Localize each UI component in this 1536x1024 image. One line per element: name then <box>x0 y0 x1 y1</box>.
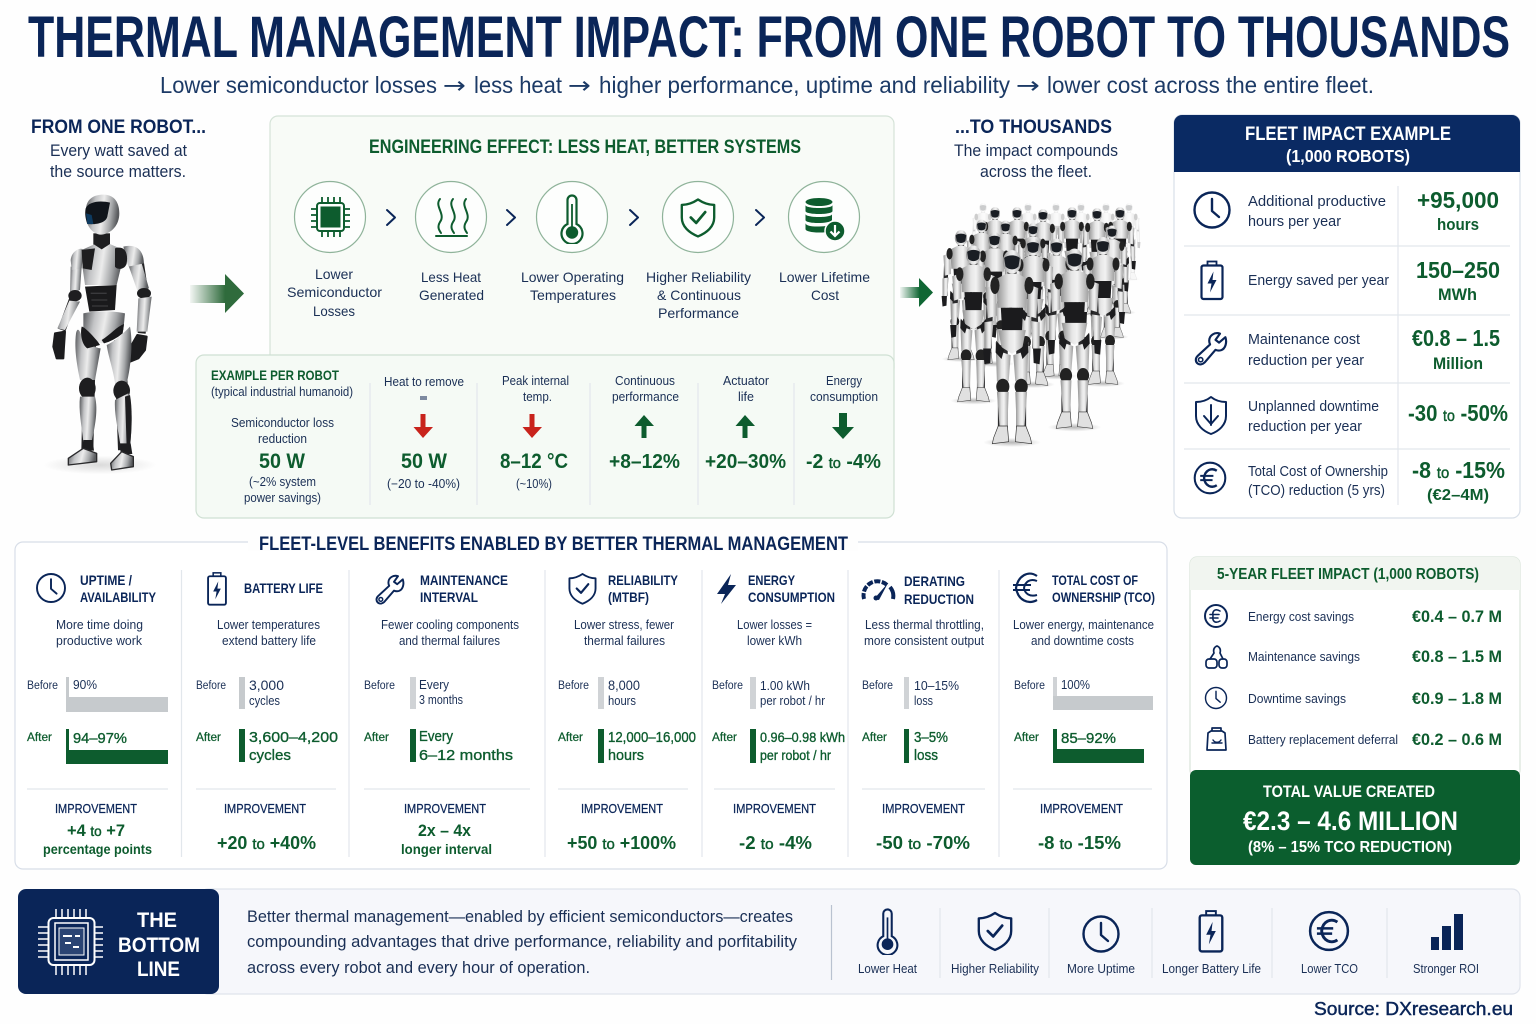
column: total cost of ownership: and downtime costs <box>1031 634 1134 648</box>
row: energy saved: Energy saved per year <box>1248 273 1389 289</box>
column: derating reduction: IMPROVEMENT <box>882 801 965 816</box>
callout: total value created: (8% – 15% TCO REDUCTION) <box>1248 839 1452 856</box>
subtitle: Lower semiconductor losses <box>160 72 437 98</box>
column: heat to remove: 50 W <box>401 450 447 473</box>
column: derating reduction: 10–15% <box>914 678 959 693</box>
column: heat to remove: (−20 to -40%) <box>387 477 460 491</box>
icon: gauge <box>863 581 893 600</box>
heading: fleet-level benefits: FLEET-LEVEL BENEFITS ENABLED BY BETTER THERMAL MANAGEMENT <box>259 534 848 555</box>
benefit: lower tco: Lower TCO <box>1301 962 1358 976</box>
chevron <box>756 210 764 225</box>
heading: uptime: UPTIME / <box>80 572 132 588</box>
column: reliability: hours <box>608 694 636 708</box>
column: reliability: Before <box>558 680 589 692</box>
column: energy consumption: 0.96–0.98 kWh <box>760 729 845 745</box>
column: energy consumption: per robot / hr <box>760 694 825 708</box>
column: battery life: extend battery life <box>222 634 316 648</box>
subtitle <box>160 72 1374 99</box>
benefit: stronger roi: Stronger ROI <box>1413 962 1479 976</box>
heading: total cost of ownership: OWNERSHIP (TCO) <box>1052 589 1155 605</box>
icon: lightning bolt <box>717 574 736 604</box>
text: impact compounds: across the fleet. <box>980 163 1092 181</box>
heading: energy consumption <box>748 572 835 605</box>
icon: chip <box>38 909 103 975</box>
row: tco reduction <box>1195 457 1505 504</box>
text: bottom line statement <box>247 907 797 977</box>
panel: engineering effect <box>270 116 894 376</box>
row: unplanned downtime <box>1196 397 1508 435</box>
heading: fleet impact example <box>1245 124 1451 166</box>
column: reliability: 8,000 <box>608 677 640 693</box>
heading: uptime <box>80 572 157 605</box>
heading: reliability: RELIABILITY <box>608 572 679 588</box>
column: maintenance interval: 2x – 4x <box>418 821 471 840</box>
row: downtime savings: Downtime savings <box>1248 692 1346 706</box>
step: lower operating temperatures: Lower Operating <box>521 269 624 285</box>
row: productive hours: Additional productive <box>1248 194 1386 210</box>
row: unplanned downtime: Unplanned downtime <box>1248 399 1379 415</box>
heading: total cost of ownership <box>1052 572 1155 605</box>
row: productive hours: hours per year <box>1248 214 1341 230</box>
benefit: longer battery life <box>1162 911 1261 976</box>
heading: derating reduction: REDUCTION <box>904 591 974 607</box>
column: semiconductor loss: reduction <box>258 432 307 446</box>
text: impact compounds <box>954 142 1118 181</box>
column: total cost of ownership: 100% <box>1061 677 1090 692</box>
row: energy cost savings <box>1205 605 1502 627</box>
step: lower lifetime cost: Lower Lifetime <box>779 269 870 285</box>
column: derating reduction: 3–5% <box>914 729 948 746</box>
benefit: stronger roi <box>1413 914 1479 976</box>
row: battery replacement deferral <box>1207 728 1502 750</box>
subtitle: → <box>1016 73 1040 99</box>
column: uptime: After <box>27 732 52 744</box>
icon: shield <box>569 574 596 604</box>
column: energy consumption <box>806 374 881 473</box>
text: bottom line statement: Better thermal management—enabled by efficient semiconductors—creates <box>247 907 793 926</box>
column: semiconductor loss: Semiconductor loss <box>231 416 334 430</box>
column: semiconductor loss <box>211 367 353 505</box>
benefit: lower tco <box>1301 912 1358 976</box>
source: Source: DXresearch.eu <box>1314 999 1513 1019</box>
icon: battery <box>208 573 226 605</box>
column: derating reduction: After <box>862 732 887 744</box>
illustration: single humanoid robot <box>43 195 157 474</box>
row: maintenance cost <box>1196 325 1500 373</box>
section: from one robot <box>31 117 206 474</box>
text: bottom line statement: compounding advantages that drive performance, reliability and porfitability <box>247 932 797 951</box>
panel: fleet-level benefits <box>15 534 1167 869</box>
icon: euro <box>1013 574 1037 602</box>
row: tco reduction: -8 to -15% <box>1412 457 1505 483</box>
column: energy consumption <box>712 572 845 853</box>
heading: energy consumption: CONSUMPTION <box>748 589 835 605</box>
arrow: to fleet <box>900 278 933 307</box>
row: maintenance cost: €0.8 – 1.5 <box>1412 325 1500 351</box>
step: higher reliability: Performance <box>658 305 739 321</box>
column: total cost of ownership: 85–92% <box>1061 730 1116 747</box>
panel: example per robot <box>196 355 894 518</box>
column: semiconductor loss: (~2% system <box>249 475 316 489</box>
column: energy consumption: per robot / hr <box>760 747 831 763</box>
column: heat to remove: Heat to remove <box>384 375 464 389</box>
column: peak internal temp: temp. <box>523 390 552 404</box>
heading: energy consumption: ENERGY <box>748 572 796 588</box>
column: uptime: IMPROVEMENT <box>55 801 137 816</box>
step: lower lifetime cost: Cost <box>811 287 839 303</box>
column: derating reduction <box>862 573 984 853</box>
column: energy consumption: Lower losses = <box>737 618 812 632</box>
subtitle: → <box>568 73 591 99</box>
column: maintenance interval: Fewer cooling components <box>381 618 519 632</box>
icon: wrench <box>377 576 403 604</box>
column: derating reduction: more consistent output <box>864 634 984 648</box>
column: battery life: After <box>196 732 221 744</box>
step: higher reliability <box>646 182 751 321</box>
step: less heat generated: Less Heat <box>421 269 481 285</box>
column: actuator life: Actuator <box>723 374 769 388</box>
column: peak internal temp: 8–12 °C <box>500 450 568 473</box>
row: battery replacement deferral: Battery replacement deferral <box>1248 733 1398 747</box>
column: total cost of ownership: Lower energy, maintenance <box>1013 618 1154 632</box>
column: reliability: After <box>558 732 583 744</box>
step: higher reliability: Higher Reliability <box>646 269 751 285</box>
column: battery life: +20 to +40% <box>217 833 316 853</box>
row: battery replacement deferral: €0.2 – 0.6 M <box>1412 731 1502 749</box>
column: peak internal temp: (~10%) <box>516 477 552 491</box>
heading: reliability <box>608 572 679 605</box>
row: downtime savings: €0.9 – 1.8 M <box>1412 690 1502 708</box>
text: every watt saved <box>50 142 187 181</box>
heading: 5-year fleet impact: 5-YEAR FLEET IMPACT (1,000 ROBOTS) <box>1217 566 1479 583</box>
row: energy saved: MWh <box>1438 285 1477 304</box>
row: unplanned downtime: -30 to -50% <box>1408 400 1508 426</box>
column: continuous performance <box>609 374 680 473</box>
row: productive hours <box>1194 187 1499 234</box>
row: energy saved: 150–250 <box>1416 257 1500 283</box>
step: lower semiconductor losses <box>287 182 382 319</box>
column: maintenance interval: Every <box>419 728 453 745</box>
benefit: higher reliability: Higher Reliability <box>951 962 1040 976</box>
column: maintenance interval: longer interval <box>401 841 492 857</box>
row: tco reduction: (TCO) reduction (5 yrs) <box>1248 483 1385 499</box>
text: every watt saved: the source matters. <box>50 163 186 181</box>
step: lower semiconductor losses: Losses <box>313 303 355 319</box>
column: uptime: productive work <box>56 634 143 648</box>
column: continuous performance: performance <box>612 390 679 404</box>
chevron <box>507 210 515 225</box>
step: lower semiconductor losses: Semiconductor <box>287 284 382 300</box>
column: uptime <box>27 572 168 857</box>
row: productive hours: hours <box>1437 215 1479 234</box>
column: reliability: thermal failures <box>584 634 665 648</box>
column: maintenance interval: Before <box>364 680 395 692</box>
callout: total value created <box>1190 770 1520 865</box>
heading: maintenance interval <box>420 572 508 605</box>
column: maintenance interval <box>364 572 519 857</box>
column: battery life: 3,600–4,200 <box>249 729 338 746</box>
column: peak internal temp <box>500 374 569 491</box>
column: energy consumption: After <box>712 732 737 744</box>
chevron <box>630 210 638 225</box>
column: maintenance interval: 3 months <box>419 693 463 707</box>
badge: the bottom line: BOTTOM <box>118 934 200 957</box>
column: battery life: 3,000 <box>249 677 284 693</box>
heading: maintenance interval: MAINTENANCE <box>420 572 508 588</box>
column: energy consumption: Before <box>712 680 743 692</box>
row: maintenance cost: Million <box>1433 354 1483 373</box>
row: maintenance cost: Maintenance cost <box>1248 332 1360 348</box>
row: maintenance savings: Maintenance savings <box>1248 650 1360 664</box>
step: higher reliability: & Continuous <box>657 287 741 303</box>
badge: the bottom line: LINE <box>137 958 180 981</box>
callout: total value created: €2.3 – 4.6 MILLION <box>1243 806 1458 836</box>
benefit: higher reliability <box>951 913 1040 976</box>
column: total cost of ownership: Before <box>1014 680 1045 692</box>
panel: the bottom line <box>18 889 1520 994</box>
heading: from one robot: FROM ONE ROBOT... <box>31 117 206 138</box>
benefit: lower heat: Lower Heat <box>858 962 917 976</box>
subtitle: less heat <box>474 72 563 98</box>
heading: fleet impact example: (1,000 ROBOTS) <box>1286 146 1410 166</box>
heading: maintenance interval: INTERVAL <box>420 589 478 605</box>
text: every watt saved: Every watt saved at <box>50 142 187 160</box>
column: uptime: Before <box>27 680 58 692</box>
illustration: robot crowd <box>942 203 1140 447</box>
column: semiconductor loss: EXAMPLE PER ROBOT <box>211 367 339 383</box>
column: energy consumption: IMPROVEMENT <box>733 801 816 816</box>
heading: to thousands: ...TO THOUSANDS <box>955 117 1112 138</box>
column: actuator life <box>705 374 786 473</box>
badge: the bottom line: THE <box>137 909 177 932</box>
row: tco reduction: (€2–4M) <box>1427 487 1489 504</box>
heading: derating reduction: DERATING <box>904 573 965 589</box>
column: actuator life: life <box>738 390 754 404</box>
column: maintenance interval: Every <box>419 677 449 692</box>
subtitle: → <box>443 73 466 99</box>
heading: battery life: BATTERY LIFE <box>244 580 323 596</box>
row: maintenance savings <box>1206 646 1502 668</box>
heading: reliability: (MTBF) <box>608 589 649 605</box>
column: derating reduction: loss <box>914 694 933 708</box>
column: battery life: cycles <box>249 694 280 708</box>
row: downtime savings <box>1206 688 1502 708</box>
column: actuator life: +20–30% <box>705 451 786 473</box>
column: maintenance interval: IMPROVEMENT <box>404 801 486 816</box>
heading: engineering effect: ENGINEERING EFFECT: LESS HEAT, BETTER SYSTEMS <box>369 136 801 158</box>
column: reliability: +50 to +100% <box>567 833 676 853</box>
column: battery life: IMPROVEMENT <box>224 801 306 816</box>
subtitle: lower cost across the entire fleet. <box>1047 72 1374 98</box>
column: derating reduction: loss <box>914 747 938 764</box>
column: reliability: hours <box>608 747 644 764</box>
column: battery life <box>196 573 338 853</box>
column: battery life: cycles <box>249 747 291 764</box>
column: reliability: 12,000–16,000 <box>608 729 696 746</box>
column: energy consumption: -2 to -4% <box>806 451 881 473</box>
column: battery life: Before <box>196 680 226 692</box>
column: total cost of ownership: After <box>1014 732 1039 744</box>
column: continuous performance: +8–12% <box>609 451 680 473</box>
section: to thousands <box>900 117 1140 447</box>
heading: fleet impact example: FLEET IMPACT EXAMPLE <box>1245 124 1451 145</box>
step: lower operating temperatures <box>521 182 624 303</box>
column: reliability: Lower stress, fewer <box>574 618 674 632</box>
heading: derating reduction <box>904 573 974 607</box>
row: maintenance savings: €0.8 – 1.5 M <box>1412 648 1502 666</box>
column: uptime: percentage points <box>43 841 152 857</box>
column: semiconductor loss: power savings) <box>244 491 321 505</box>
column: total cost of ownership: IMPROVEMENT <box>1040 801 1123 816</box>
text: bottom line statement: across every robot and every hour of operation. <box>247 958 590 977</box>
icon: clock <box>37 574 65 602</box>
row: energy cost savings: Energy cost savings <box>1248 610 1354 624</box>
row: energy cost savings: €0.4 – 0.7 M <box>1412 608 1502 626</box>
column: uptime: 94–97% <box>73 730 127 747</box>
column: energy consumption: lower kWh <box>747 634 802 648</box>
column: maintenance interval: and thermal failures <box>399 634 500 648</box>
column: total cost of ownership: -8 to -15% <box>1038 833 1121 853</box>
column: energy consumption: 1.00 kWh <box>760 678 810 693</box>
column: uptime: +4 to +7 <box>67 821 125 840</box>
column: derating reduction: -50 to -70% <box>876 833 970 853</box>
callout: total value created: TOTAL VALUE CREATED <box>1263 783 1435 801</box>
chevron <box>387 210 395 225</box>
column: uptime: 90% <box>73 677 97 692</box>
step: lower operating temperatures: Temperatures <box>530 287 616 303</box>
arrow: robot to effect <box>190 274 244 313</box>
benefit: lower heat <box>858 909 917 976</box>
badge: the bottom line <box>18 889 219 994</box>
panel: fleet impact example <box>1174 115 1520 518</box>
column: peak internal temp: Peak internal <box>502 374 569 388</box>
column: uptime: More time doing <box>56 618 143 632</box>
column: maintenance interval: 6–12 months <box>419 747 513 764</box>
step: less heat generated <box>416 182 486 303</box>
row: tco reduction: Total Cost of Ownership <box>1248 464 1388 480</box>
heading: uptime: AVAILABILITY <box>80 589 157 605</box>
column: maintenance interval: After <box>364 732 389 744</box>
column: heat to remove <box>384 375 464 491</box>
column: continuous performance: Continuous <box>615 374 675 388</box>
column: reliability: IMPROVEMENT <box>581 801 663 816</box>
column: semiconductor loss: (typical industrial humanoid) <box>211 385 353 399</box>
column: energy consumption: consumption <box>810 390 878 404</box>
subtitle: higher performance, uptime and reliability <box>599 72 1010 98</box>
column: derating reduction: Before <box>862 680 893 692</box>
panel: 5-year fleet impact <box>1190 557 1520 865</box>
benefit: longer battery life: Longer Battery Life <box>1162 962 1261 976</box>
step: less heat generated: Generated <box>419 287 484 303</box>
row: productive hours: +95,000 <box>1417 187 1499 213</box>
row: energy saved <box>1202 257 1500 304</box>
benefit: more uptime: More Uptime <box>1067 962 1135 976</box>
heading: total cost of ownership: TOTAL COST OF <box>1052 572 1138 588</box>
column: total cost of ownership <box>1013 572 1155 853</box>
column: reliability <box>558 572 696 853</box>
row: unplanned downtime: reduction per year <box>1248 419 1362 435</box>
column: derating reduction: Less thermal throttling, <box>865 618 984 632</box>
text: impact compounds: The impact compounds <box>954 142 1118 160</box>
step: lower semiconductor losses: Lower <box>315 266 353 282</box>
column: semiconductor loss: 50 W <box>259 450 305 473</box>
step: lower lifetime cost <box>779 182 870 303</box>
column: energy consumption: -2 to -4% <box>739 833 812 853</box>
column: battery life: Lower temperatures <box>217 618 320 632</box>
column: energy consumption: Energy <box>826 374 863 388</box>
benefit: more uptime <box>1067 916 1135 976</box>
row: maintenance cost: reduction per year <box>1248 353 1364 369</box>
